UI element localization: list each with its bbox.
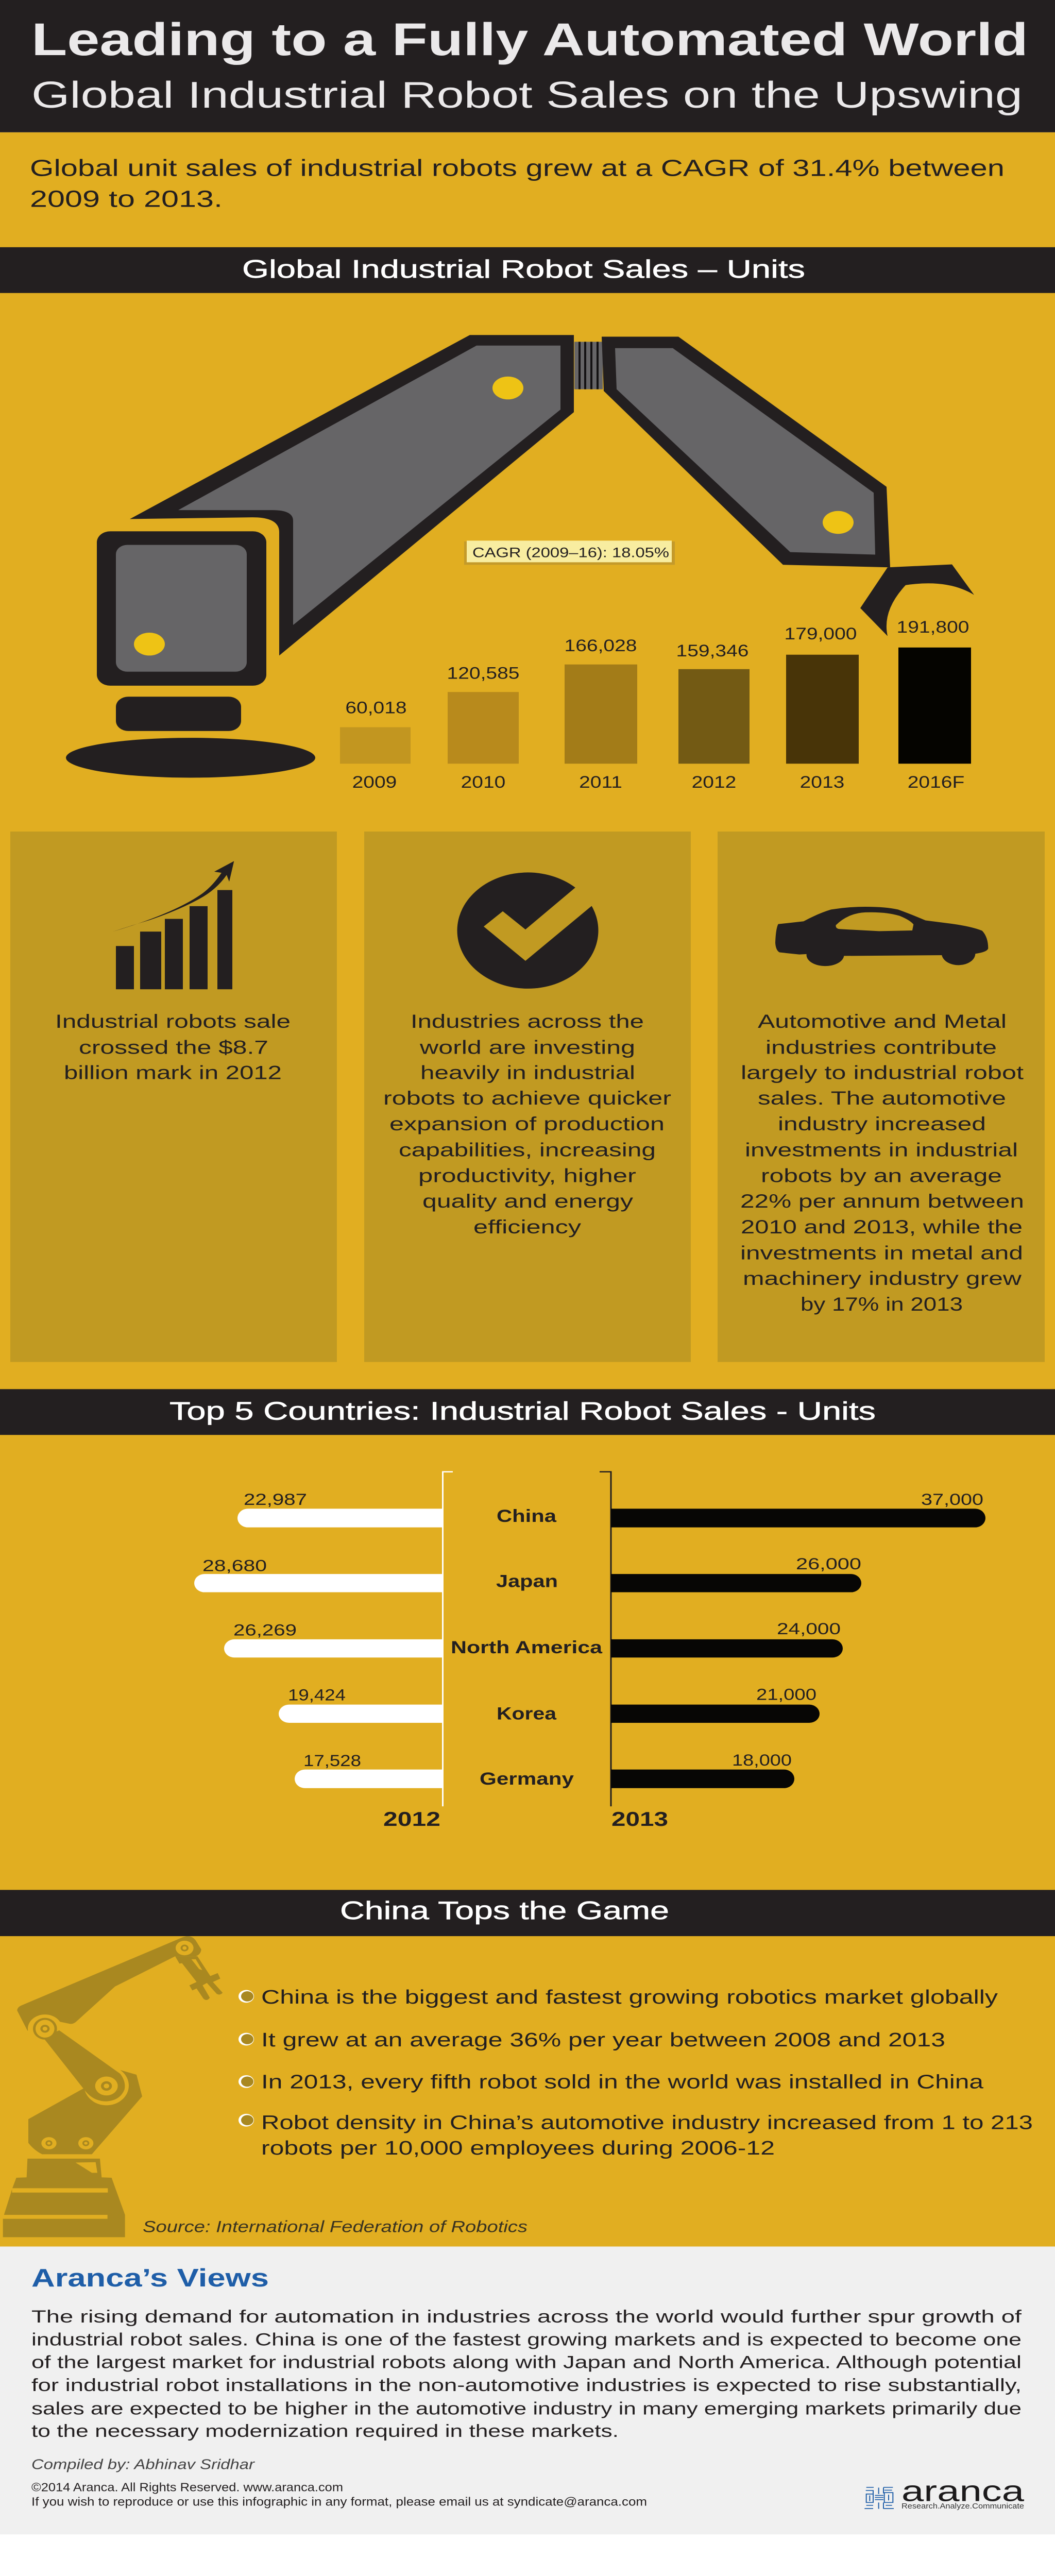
text: automotive and metal: 2010 and 2013, while the — [741, 1216, 1023, 1238]
section heading: top 5 countries: Top 5 Countries: Industrial Robot Sales - Units — [169, 1397, 876, 1425]
paragraph: industrial robot sales. China is one of the fastest growing markets and is expected to become one — [31, 2330, 1022, 2349]
text: investment drivers: expansion of production — [389, 1113, 665, 1134]
paragraph: The rising demand for automation in industries across the world would further spur growth of — [31, 2307, 1022, 2327]
2012 values: 19,424 — [288, 1686, 346, 1704]
text: investment drivers: heavily in industrial — [420, 1062, 635, 1083]
year labels — [383, 1808, 668, 1831]
logo tagline: Research.Analyze.Communicate — [901, 2502, 1024, 2511]
forearm — [602, 336, 890, 567]
bar chart: global sales: 2012 — [692, 773, 736, 791]
country labels: North America — [451, 1637, 603, 1657]
robot body — [66, 531, 315, 777]
text: investment drivers: Industries across the — [411, 1011, 644, 1032]
bullet text: Robot density in China’s automotive industry increased from 1 to 213 — [261, 2111, 1033, 2133]
icon: car — [775, 907, 988, 966]
country labels: Germany — [480, 1769, 574, 1789]
icon: robot arm silhouette — [3, 1936, 223, 2237]
text: investment drivers: productivity, higher — [418, 1165, 636, 1187]
text: sales milestone: crossed the $8.7 — [79, 1037, 268, 1058]
diverging bar chart: top 5 countries — [194, 1472, 985, 1831]
2013 values — [732, 1490, 983, 1769]
section heading: China — [0, 1890, 1055, 1936]
2013 values: 18,000 — [732, 1751, 792, 1769]
2013 bars — [611, 1509, 985, 1788]
text: sales milestone: Industrial robots sale — [55, 1011, 291, 1032]
copyright — [31, 2481, 647, 2509]
text: automotive and metal: sales. The automotive — [758, 1088, 1006, 1109]
text: automotive and metal: industries contribute — [765, 1037, 997, 1058]
bullet text: robots per 10,000 employees during 2006-12 — [261, 2137, 775, 2159]
2012 bars — [194, 1509, 443, 1788]
CAGR callout — [464, 540, 675, 565]
bar chart: global sales: 191,800 — [897, 618, 969, 636]
paragraph — [31, 2307, 1022, 2441]
2012 values: 22,987 — [244, 1490, 307, 1509]
2013 values: 21,000 — [756, 1686, 816, 1704]
2012 values: 17,528 — [303, 1752, 361, 1770]
text: investment drivers: robots to achieve quicker — [383, 1088, 671, 1109]
copyright: ©2014 Aranca. All Rights Reserved. www.aranca.com — [31, 2481, 343, 2494]
section heading: China: China Tops the Game — [340, 1896, 669, 1925]
text: sales milestone: billion mark in 2012 — [64, 1062, 282, 1083]
text: investment drivers: capabilities, increasing — [399, 1139, 656, 1161]
year labels: 2012 — [383, 1808, 440, 1831]
2013 values: 26,000 — [796, 1555, 861, 1573]
paragraph: sales are expected to be higher in the automotive industry in many emerging markets primarily due — [31, 2399, 1022, 2419]
2012 values: 28,680 — [202, 1557, 267, 1575]
bar chart: global sales: 2013 — [800, 773, 844, 791]
text: automotive and metal: Automotive and Metal — [758, 1011, 1007, 1032]
bullet markers — [239, 1990, 254, 2127]
text: automotive and metal — [740, 1011, 1024, 1315]
panel: Aranca's views — [0, 2246, 1055, 2534]
bar chart: global sales: 179,000 — [785, 624, 857, 643]
bar chart: global sales: 2011 — [579, 773, 622, 791]
text: automotive and metal: industry increased — [778, 1113, 986, 1134]
text: automotive and metal: by 17% in 2013 — [801, 1294, 963, 1315]
copyright: If you wish to reproduce or use this infographic in any format, please email us at syndicate@aranca.com — [31, 2496, 647, 2509]
compiled by: Compiled by: Abhinav Sridhar — [31, 2456, 256, 2472]
text: automotive and metal: investments in metal and — [740, 1242, 1023, 1264]
paragraph: of the largest market for industrial robots along with Japan and North America. Although potential — [31, 2352, 1022, 2372]
text: sales milestone — [55, 1011, 291, 1083]
upper arm — [130, 335, 574, 655]
text: investment drivers — [383, 1011, 671, 1238]
country labels: Japan — [496, 1571, 558, 1591]
bar chart: global sales: 60,018 — [345, 699, 407, 717]
bar chart: global sales: 166,028 — [565, 636, 637, 655]
subtitle: Global Industrial Robot Sales on the Upswing — [31, 74, 1023, 116]
2012 values — [202, 1490, 361, 1770]
section heading: global sales: Global Industrial Robot Sales – Units — [242, 255, 805, 283]
intro text: Global unit sales of industrial robots grew at a CAGR of 31.4% between — [30, 155, 1005, 181]
text: investment drivers: efficiency — [473, 1216, 581, 1238]
text: investment drivers: world are investing — [419, 1037, 635, 1058]
icon: rising bars with arrow — [112, 861, 234, 989]
2013 values: 37,000 — [921, 1490, 983, 1509]
panel: investment drivers — [364, 832, 691, 1362]
bullet text: It grew at an average 36% per year between 2008 and 2013 — [261, 2029, 945, 2050]
country labels — [451, 1506, 603, 1789]
heading: Aranca’s Views — [31, 2263, 269, 2292]
axes — [443, 1472, 611, 1806]
paragraph: for industrial robot installations in the non-automotive industries is expected to rise substantially, — [31, 2376, 1022, 2395]
text: automotive and metal: investments in industrial — [745, 1139, 1018, 1161]
intro text: 2009 to 2013. — [30, 185, 223, 212]
accordion joint — [574, 342, 603, 389]
bullet text — [261, 1986, 1033, 2159]
logo: aranca — [864, 2475, 1025, 2511]
bullet text: China is the biggest and fastest growing robotics market globally — [261, 1986, 998, 2008]
country labels: China — [497, 1506, 557, 1526]
text: automotive and metal: machinery industry grew — [743, 1268, 1022, 1289]
source note: Source: International Federation of Robotics — [143, 2218, 528, 2236]
logo wordmark: aranca — [901, 2475, 1025, 2507]
intro text — [30, 155, 1005, 212]
text: investment drivers: quality and energy — [422, 1191, 633, 1212]
panel: automotive and metal — [718, 832, 1045, 1362]
bar chart: global sales: 120,585 — [447, 664, 519, 683]
CAGR callout: CAGR (2009–16): 18.05% — [472, 545, 669, 561]
bar chart: global sales: 2010 — [461, 773, 505, 791]
2013 values: 24,000 — [777, 1620, 841, 1638]
bullet list: China facts — [239, 1986, 1033, 2159]
section heading: top 5 countries — [0, 1389, 1055, 1435]
text: automotive and metal: 22% per annum between — [740, 1191, 1024, 1212]
text: automotive and metal: largely to industrial robot — [741, 1062, 1024, 1083]
bar chart: global sales: 2016F — [908, 773, 964, 791]
country labels: Korea — [497, 1704, 557, 1724]
title banner — [0, 0, 1055, 132]
bar chart: global sales: 2009 — [352, 773, 397, 791]
section heading: global sales — [0, 247, 1055, 293]
bar chart: global sales — [340, 618, 971, 791]
paragraph: to the necessary modernization required in these markets. — [31, 2421, 619, 2441]
panel: sales milestone — [10, 832, 337, 1362]
icon: check mark — [457, 872, 603, 989]
bar chart: global sales: 159,346 — [676, 641, 748, 660]
logo mark — [864, 2487, 894, 2509]
main title: Leading to a Fully Automated World — [31, 13, 1028, 65]
year labels: 2013 — [611, 1808, 668, 1831]
2012 values: 26,269 — [233, 1621, 297, 1639]
bullet text: In 2013, every fifth robot sold in the world was installed in China — [261, 2071, 984, 2093]
gripper — [860, 564, 974, 636]
text: automotive and metal: robots by an average — [761, 1165, 1002, 1187]
robot arm illustration — [66, 335, 974, 777]
